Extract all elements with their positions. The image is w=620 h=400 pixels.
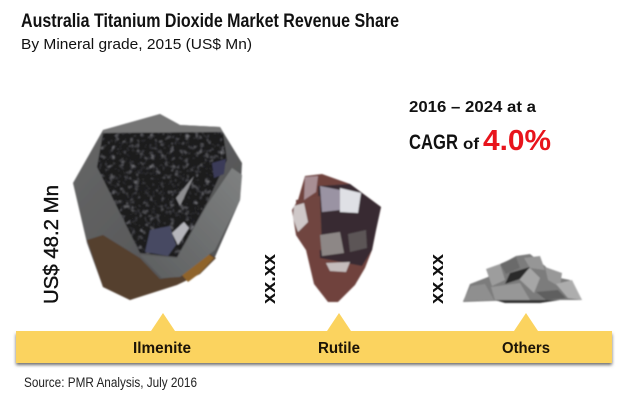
CAGR callout: CAGR [409, 131, 458, 154]
value label: Rutile: xx.xx [259, 254, 279, 304]
value label: Ilmenite: US$ 48.2 Mn [41, 185, 63, 304]
source note: Source: PMR Analysis, July 2016 [24, 375, 197, 390]
category banner [16, 313, 612, 365]
label: Ilmenite: Ilmenite [133, 340, 191, 357]
label: Others: Others [502, 340, 550, 357]
icon: others stone pile [463, 254, 582, 303]
value label: Others: xx.xx [427, 254, 447, 304]
CAGR callout: 2016 – 2024 at a [409, 99, 536, 116]
CAGR callout: 4.0% [483, 125, 551, 157]
title: Australia Titanium Dioxide Market Revenue Share [21, 10, 399, 32]
CAGR callout: of [463, 136, 480, 153]
icon: rutile crystal [292, 174, 381, 302]
icon: ilmenite rock [73, 114, 242, 300]
CAGR callout [409, 99, 551, 157]
label: Rutile: Rutile [318, 340, 360, 357]
subtitle: By Mineral grade, 2015 (US$ Mn) [21, 36, 252, 53]
